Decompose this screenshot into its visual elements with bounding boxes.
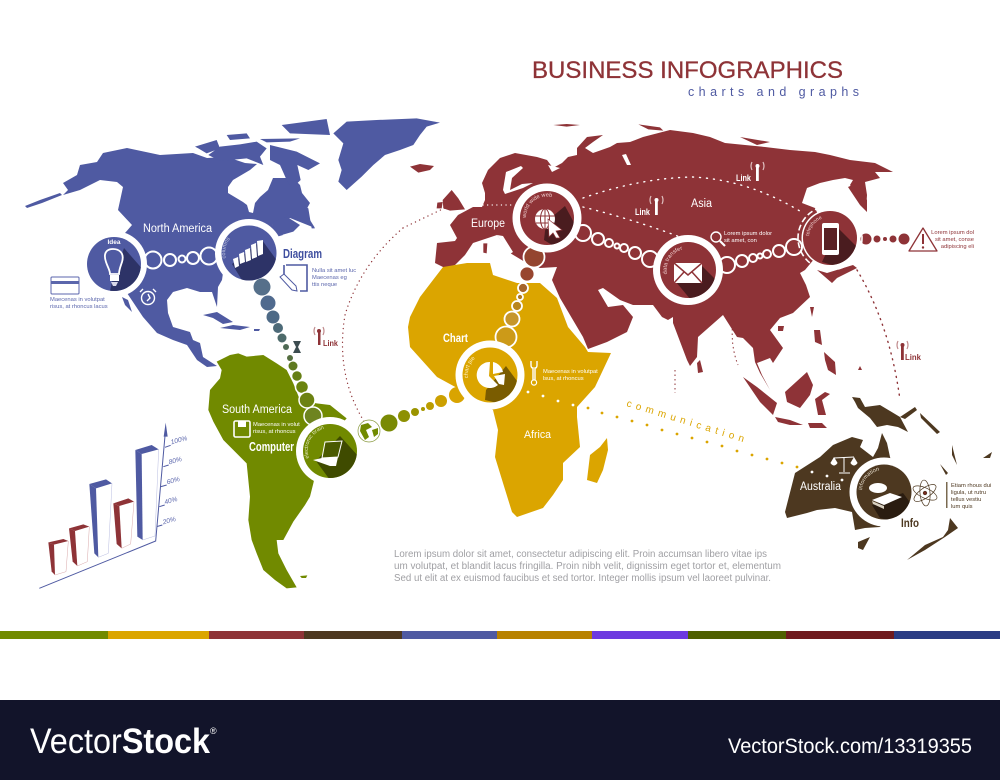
callout: wrench: Maecenas in volutpat [543,369,598,375]
title: BUSINESS INFOGRAPHICS [532,57,843,84]
callout: warning: Lorem ipsum dol [931,230,974,236]
callout: credit card: risus, at rhoncus lacus [50,304,108,310]
communication label: communication [626,402,744,442]
bars [48,445,159,575]
icon: envelope [674,263,702,283]
colour stripe [0,631,1000,639]
icon: globe with cursor [535,209,562,238]
callout: warning [909,228,974,251]
icon: light bulb [105,249,123,286]
bead chain: Europe to Asia [575,225,658,267]
text block: body copy: um volutpat, et blandit lacus fringilla. Proin nibh velit, dignissim eget tortor et, elementum [394,561,781,572]
labels: continents: Australia [800,481,842,493]
footer band [0,700,1000,780]
axis labels: 20% [161,516,177,527]
callout: magnifier: sit amet, con [724,238,757,244]
axis labels: 100% [170,435,188,446]
map: Australia and Oceania [785,397,992,560]
map: Madagascar [587,438,608,483]
link icon: Europe: Link [635,207,651,217]
bead chain: North America [144,248,218,268]
callout: info text: Etiam rhous dui [951,483,991,489]
axis labels: 40% [164,496,178,506]
node: data transfer: data transfer [662,246,682,274]
callout: notepad: Nulla sit amet luc [312,268,356,274]
callout: notepad: ttis neque [312,282,337,288]
axis labels: 60% [166,476,181,486]
callout: info text: tellus vestiu [951,497,981,503]
icon: atom [911,480,939,506]
node: chart pie [456,340,524,410]
callout: floppy disk: Maecenas in volut [253,422,300,428]
map: Southeast Asia islands [697,137,867,428]
link icon: Pacific: Link [905,352,921,362]
bead chain: Africa to Europe [496,246,544,348]
chart axes [39,428,171,588]
callout: wrench [531,361,598,385]
footer band: ® [210,726,217,736]
heading: Chart: Chart [443,331,468,345]
heading: Info: Info [901,516,919,530]
footer logo: VectorStock [30,722,210,761]
callout: credit card [50,277,108,310]
link icon: Europe [635,196,663,217]
bead chain: South America to Africa [380,387,465,432]
node: electronic brain: electronic brain [304,426,324,458]
callout: info text: ligula, ut rutru [951,490,986,496]
node: idea [87,233,147,294]
labels: continents: Africa [524,429,552,441]
node: idea: Idea [107,239,121,246]
labels: continents: North America [143,223,213,235]
node: information: information [858,468,879,490]
icon: globe node [358,420,380,442]
link icon: Siberia: Link [736,173,752,183]
axis labels: 80% [168,456,183,466]
callout: info text: lum quis [951,504,973,510]
node: world wide web: world wide web [522,192,552,218]
map: Greenland [333,118,440,190]
text block: body copy: Sed ut elit at ex euismod faucibus et sed tortor. Integer mollis ipsum vel laoreet pulvinar. [394,573,771,584]
map: South America [208,353,347,588]
bead chain: Asia [719,239,802,273]
callout: magnifier: Lorem ipsum dolor [724,231,772,237]
map: Arctic archipelago [195,119,330,235]
dotted link arcs [342,177,900,423]
icon: pie chart [477,362,505,388]
callout: info text [946,482,991,510]
callout: warning: sit amet, conse [935,237,974,243]
text block: body copy: Lorem ipsum dolor sit amet, consectetur adipiscing elit. Proin accumsan libero vitae ips [394,549,767,560]
callout: warning: adipiscing eli [941,244,974,250]
bead chain: to warning [860,234,910,244]
icon: column chart [233,240,263,268]
node: telephone [797,208,863,270]
node: columns [215,219,279,280]
callout: notepad [280,265,356,291]
node: data transfer [653,235,723,305]
callout: floppy disk: risus, at rhoncus [253,429,296,435]
labels: continents: South America [222,404,293,416]
heading: Computer: Computer [249,439,294,454]
title [532,57,859,99]
callout: wrench: lsus, at rhoncus [543,376,584,382]
link icon: Pacific [897,341,921,362]
node: world wide web [512,184,582,252]
labels: continents [143,198,842,493]
callout: credit card: Maecenas in volutpat [50,297,105,303]
link icon: America: Link [323,338,338,348]
icon: smartphone [822,223,839,255]
bar chart: 3D columns [39,423,188,588]
footer id: VectorStock.com/13319355 [728,735,972,758]
node: telephone: telephone [806,216,822,236]
bead chain: North to South America [254,278,322,425]
map: British Isles and islands [410,124,663,253]
link icon: America [314,327,338,348]
map: Africa [408,263,611,517]
map: Eurasia [410,124,893,428]
map: Caribbean islands [203,312,260,331]
node: chart pie: chart pie [464,357,474,378]
node: columns: columns [221,238,230,258]
icon: laptop [313,441,342,466]
labels: continents: Europe [471,216,505,230]
icon: book and speech [869,483,902,509]
callout: magnifier [711,231,772,246]
node: information [850,458,912,526]
icon: hourglass [293,341,301,353]
heading: Diagram: Diagram [283,246,322,261]
map: North America [25,118,440,367]
callout: notepad: Maecenas eg [312,275,347,281]
icon: alarm clock [140,289,156,304]
axis labels [161,435,188,527]
text block: body copy [394,549,781,584]
subtitle: charts and graphs [688,85,859,99]
icon: scales [831,457,857,473]
labels: continents: Asia [691,198,713,210]
callout: floppy disk [234,421,300,437]
link icon: Siberia [736,162,764,183]
node: electronic brain [296,417,357,481]
